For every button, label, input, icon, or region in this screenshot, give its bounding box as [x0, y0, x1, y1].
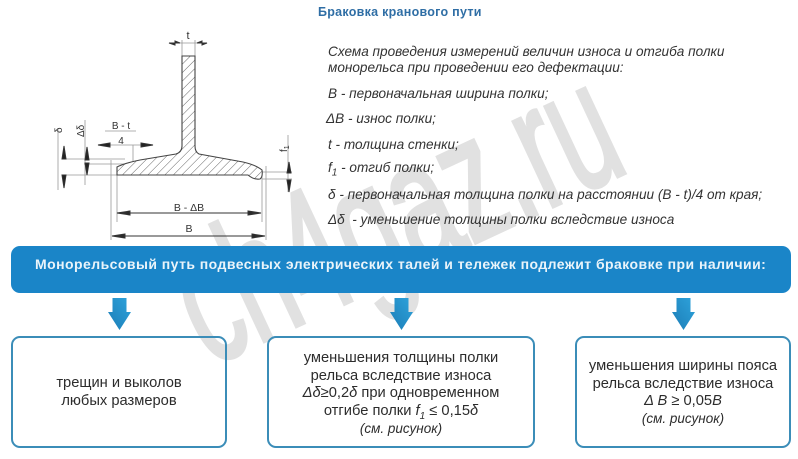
description text block: Δδ - уменьшение толщины полки вследствие износа	[328, 212, 674, 227]
title: Браковка кранового пути	[318, 5, 482, 19]
description text block	[326, 44, 762, 227]
rail cross-section diagram: 1	[284, 145, 291, 149]
panel: flange thickness: Δδ≥0,2δ при одновременном	[303, 385, 499, 401]
panel: cracks: любых размеров	[61, 393, 177, 409]
rail cross-section diagram: B - t	[112, 121, 130, 132]
panel: flange thickness: уменьшения толщины полки	[304, 350, 498, 366]
arrow: left	[108, 298, 131, 330]
blue banner: Монорельсовый путь подвесных электрических талей и тележек подлежит браковке при наличии:	[35, 256, 766, 272]
panel: flange thickness: (см. рисунок)	[360, 421, 442, 436]
rail cross-section diagram: f	[279, 149, 290, 152]
description text block: δ - первоначальная толщина полки на расстоянии (B - t)/4 от края;	[328, 187, 762, 202]
panel: flange width: уменьшения ширины пояса	[589, 358, 777, 374]
panel: flange width	[575, 336, 791, 448]
rail cross-section diagram: δ	[54, 127, 65, 133]
panel: flange width: (см. рисунок)	[642, 411, 724, 426]
description text block: Схема проведения измерений величин износа и отгиба полки	[328, 44, 724, 59]
description text block: монорельса при проведении его дефектации:	[328, 60, 624, 75]
blue banner	[11, 246, 791, 293]
hatched rail profile	[117, 56, 262, 179]
rail cross-section diagram: B	[185, 223, 193, 235]
arrow: right	[672, 298, 695, 330]
rail cross-section diagram: t	[186, 30, 190, 42]
panel: cracks	[11, 336, 227, 448]
panel: flange width: рельса вследствие износа	[593, 376, 773, 392]
description text block: B - первоначальная ширина полки;	[328, 86, 549, 101]
rail cross-section diagram: B - ΔB	[174, 202, 204, 214]
description text block: f1 - отгиб полки;	[328, 160, 434, 179]
panel: flange thickness	[267, 336, 535, 448]
arrow: middle	[390, 298, 413, 330]
panel: flange thickness: отгибе полки f1 ≤ 0,15δ	[324, 403, 478, 422]
description text block: ΔB - износ полки;	[326, 111, 436, 126]
rail cross-section diagram: 4	[118, 136, 124, 147]
rail cross-section diagram	[54, 30, 292, 240]
rail cross-section diagram: Δδ	[76, 124, 87, 137]
description text block: t - толщина стенки;	[328, 137, 459, 152]
watermark: ch4gaz.ru	[141, 25, 648, 401]
panel: flange width: Δ B ≥ 0,05B	[644, 393, 722, 409]
panel: flange thickness: рельса вследствие износа	[311, 368, 491, 384]
panel: cracks: трещин и выколов	[56, 375, 182, 391]
